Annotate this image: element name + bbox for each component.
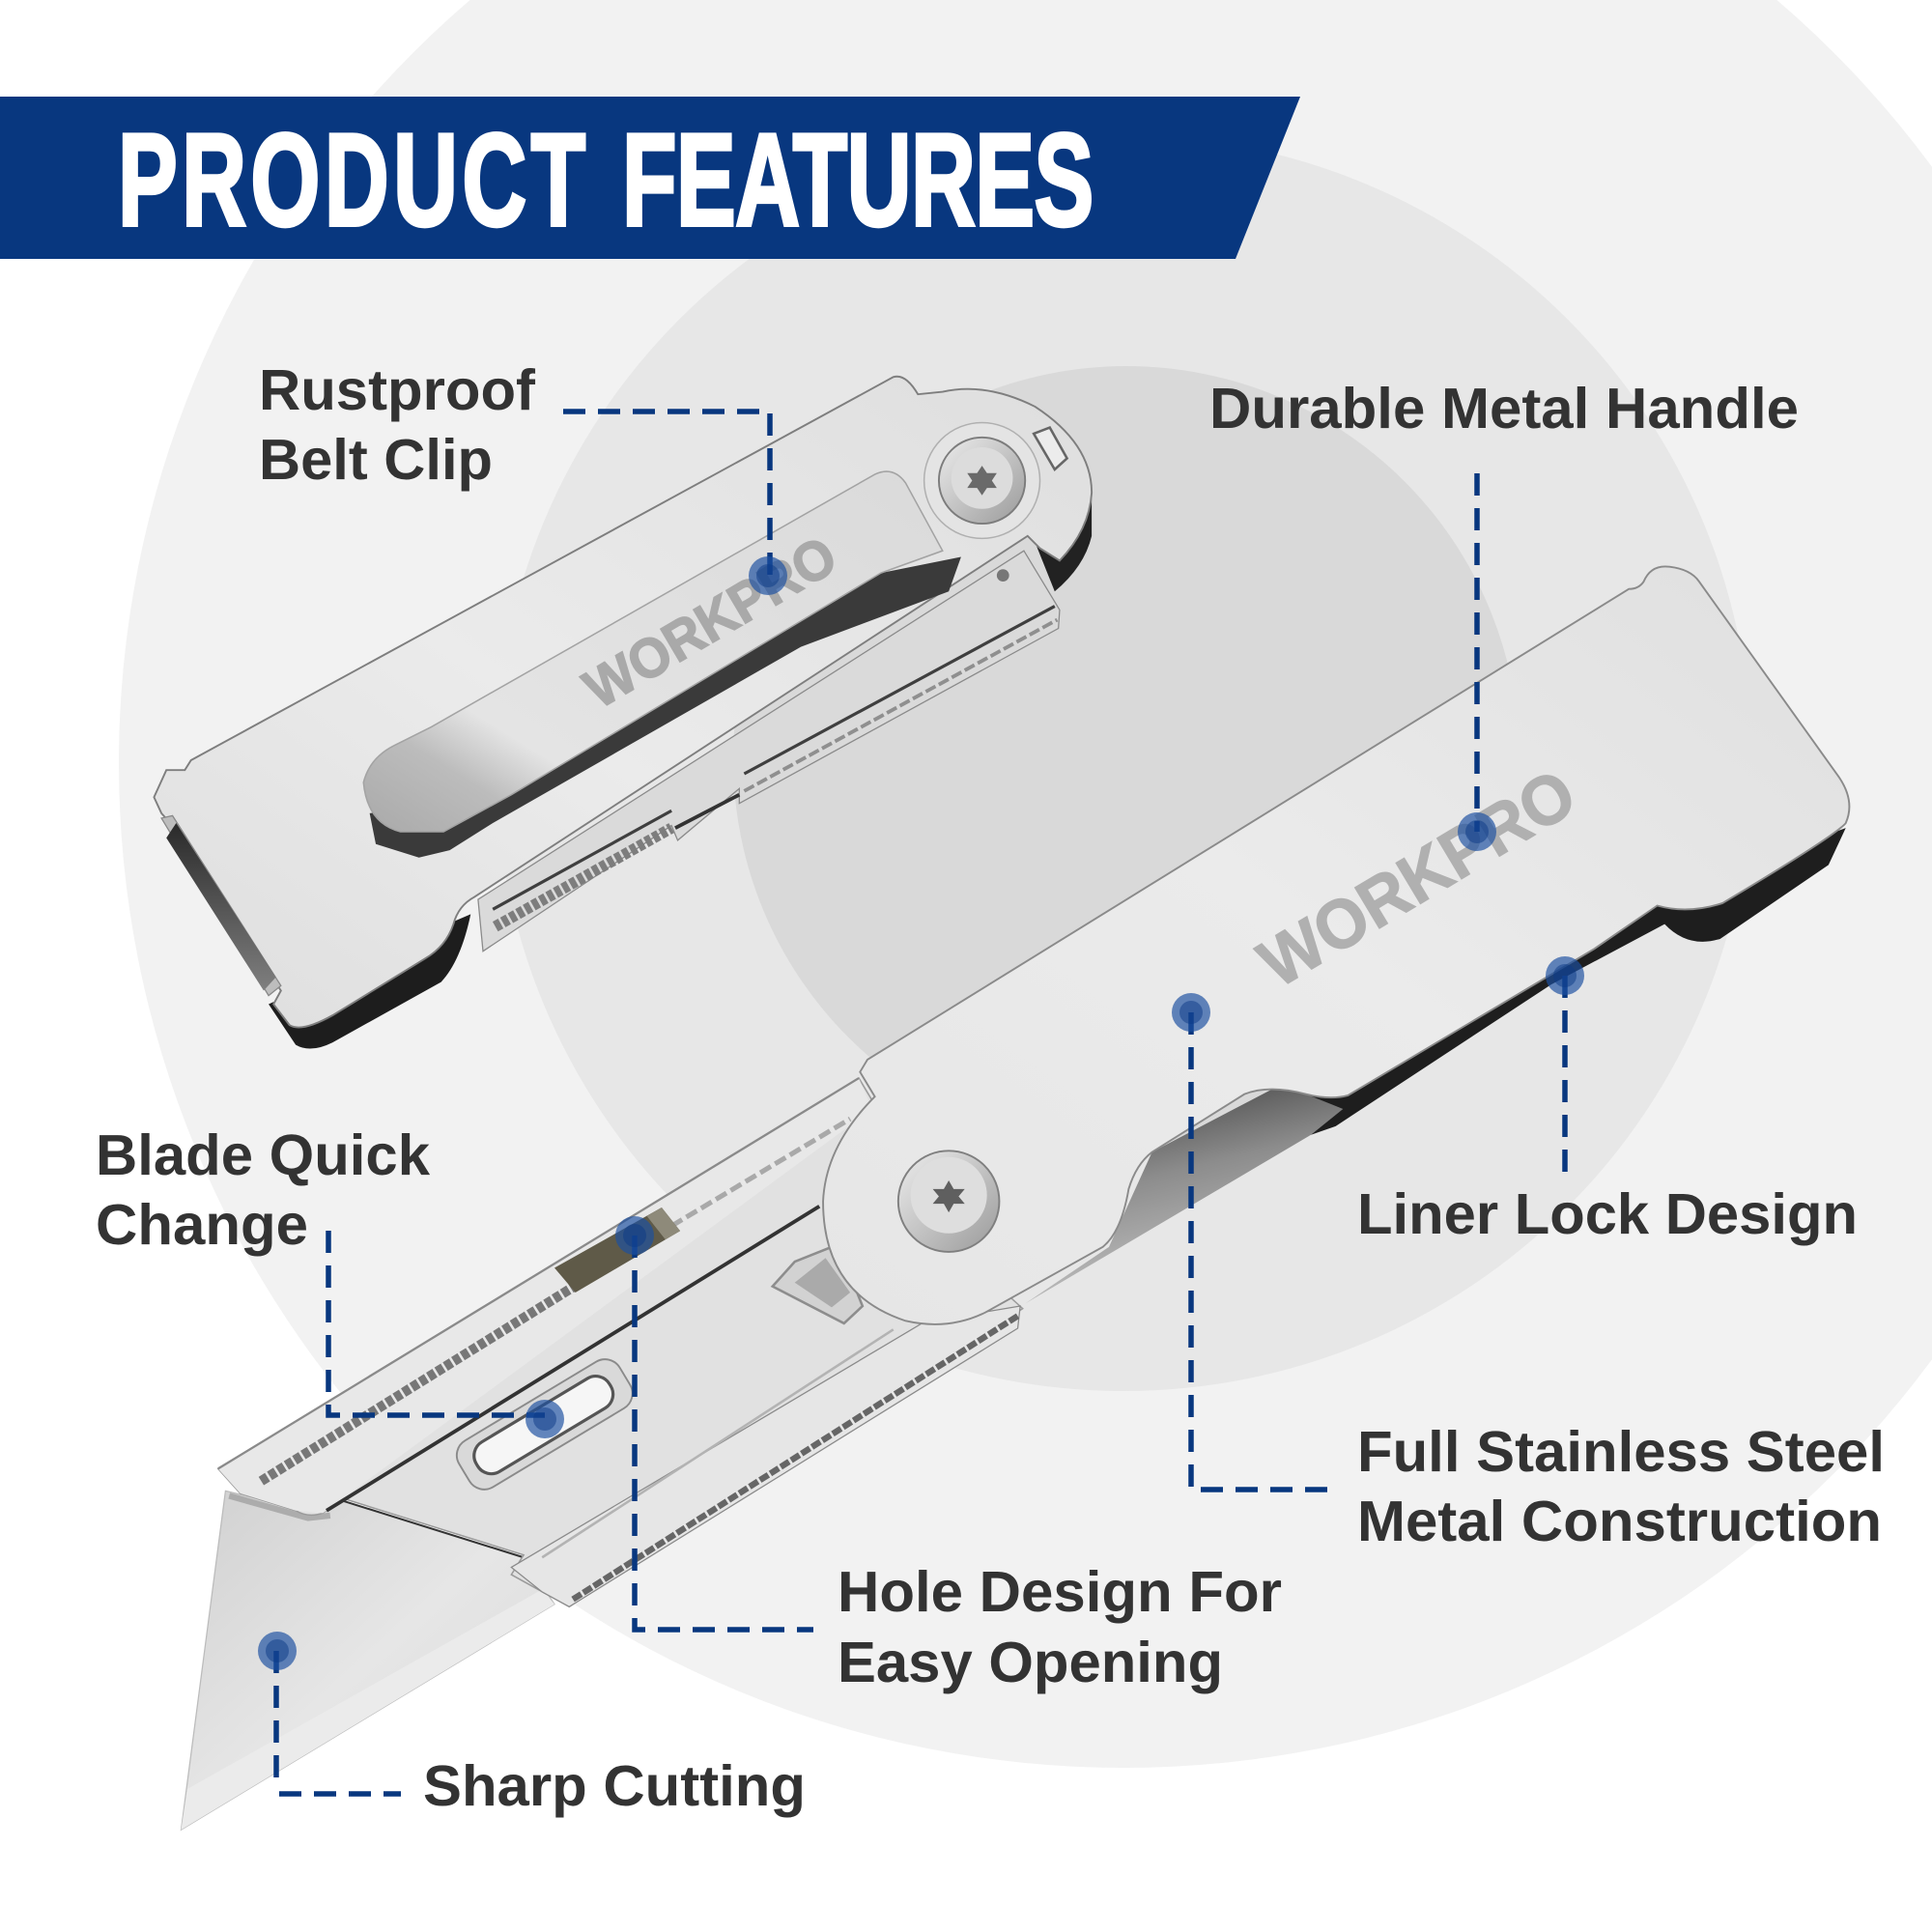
knife blade [181,1491,554,1830]
watermark: WORKPRO [574,525,847,721]
callout: hole design for easy opening [615,1216,1282,1694]
callout: full stainless steel metal construction: Full Stainless Steel [1357,1420,1885,1484]
title banner: PRODUCT [118,106,585,253]
bolt mount [924,422,1067,538]
blade slot at end [161,815,281,996]
blade change window [554,1208,680,1293]
black liner under handle [1293,828,1846,1135]
black disc edge [1035,487,1092,591]
small screw [997,569,1009,582]
title banner [0,97,1300,259]
upper rail [218,1078,872,1513]
callout: liner lock design: Liner Lock Design [1357,1182,1858,1246]
callout: sharp cutting [258,1632,806,1818]
folded utility knife with belt clip [154,377,1092,1049]
thumb cut-out [773,1244,863,1323]
callout: blade quick change [96,1123,564,1438]
callout: liner lock design [1357,956,1858,1246]
callout: sharp cutting: Sharp Cutting [423,1754,806,1818]
callout: full stainless steel metal construction: Metal Construction [1357,1490,1882,1553]
callout: durable metal handle: Durable Metal Handle [1209,377,1799,440]
title banner: FEATURES [622,106,1094,253]
handle plate and pivot disc [823,566,1849,1324]
lower rail [511,1306,1020,1606]
callout: rustproof belt clip: Rustproof [259,358,535,422]
callout: blade quick change: Change [96,1193,308,1257]
blade holder body [218,1078,1023,1606]
hole for easy opening [450,1353,639,1495]
handle plate [154,377,1092,1028]
callout: durable metal handle [1209,377,1799,851]
callout: rustproof belt clip: Belt Clip [259,428,493,492]
black lower liner [269,914,470,1049]
callout: full stainless steel metal construction [1172,993,1885,1553]
open utility knife [181,566,1849,1830]
callout: hole design for easy opening: Easy Opening [838,1631,1223,1694]
rail of folded knife [478,551,1060,952]
callout: hole design for easy opening: Hole Design For [838,1560,1282,1624]
clip shadow [370,557,961,858]
dark gap behind handle notch [1025,1084,1343,1303]
callout: blade quick change: Blade Quick [96,1123,430,1187]
pivot bolt [898,1151,999,1252]
belt clip [363,471,943,832]
callout: rustproof belt clip [259,358,787,595]
watermark: WORKPRO [1246,754,1589,1003]
